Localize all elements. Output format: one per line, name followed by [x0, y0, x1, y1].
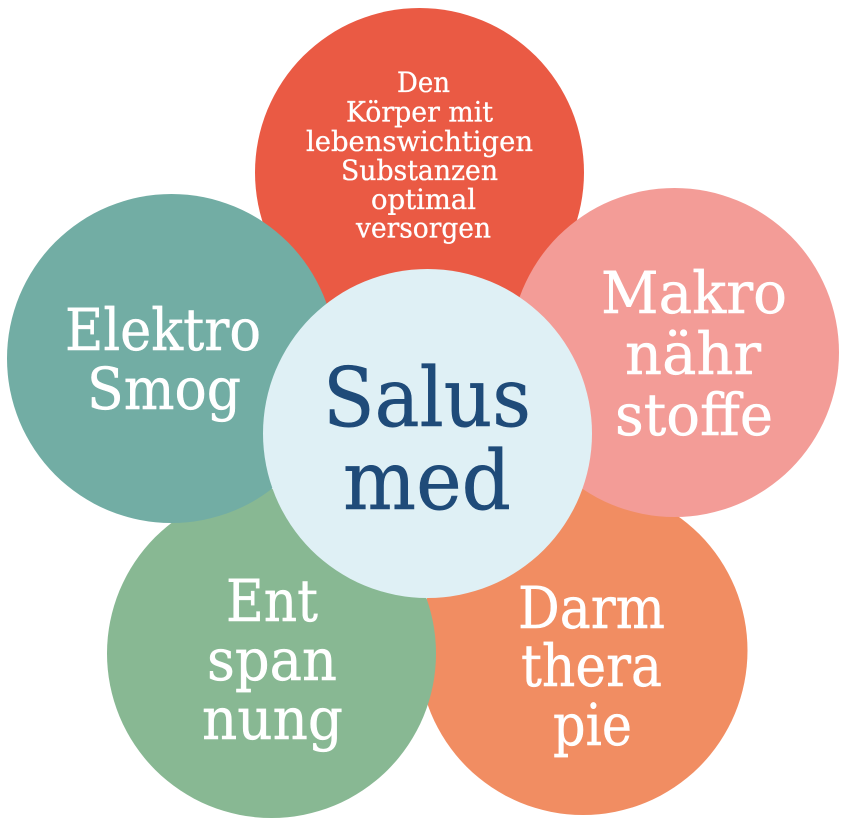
petal: Den Körper mit lebenswichtigen Substanzen optimal versorgen: Den: [397, 66, 450, 99]
petal: Den Körper mit lebenswichtigen Substanzen optimal versorgen: lebenswichtigen: [306, 125, 533, 158]
petal: Den Körper mit lebenswichtigen Substanzen optimal versorgen: [255, 8, 584, 337]
petal: Elektrosmog: Smog: [87, 355, 241, 423]
petal: Entspannung: [107, 489, 436, 818]
center circle: Salus med: med: [343, 434, 511, 529]
petal: Darmtherapie: thera: [521, 632, 662, 700]
petal: Den Körper mit lebenswichtigen Substanzen optimal versorgen: Substanzen: [341, 154, 498, 187]
petal: Makronährstoffe: [510, 188, 839, 517]
petal: Den Körper mit lebenswichtigen Substanzen optimal versorgen: versorgen: [355, 212, 491, 244]
petal: Makronährstoffe: Makro: [601, 259, 787, 327]
center circle: Salus med: Salus: [323, 351, 531, 446]
petal: Darmtherapie: [418, 486, 748, 815]
petal: Den Körper mit lebenswichtigen Substanzen optimal versorgen: Körper mit: [346, 96, 494, 128]
petal: Darmtherapie: pie: [553, 691, 632, 759]
petal: Entspannung: nung: [202, 685, 343, 753]
petal: Elektrosmog: [7, 194, 336, 523]
petal: Makronährstoffe: stoffe: [615, 381, 773, 449]
center circle: Salus med: [263, 269, 592, 598]
petal: Entspannung: Ent: [226, 567, 318, 635]
petal: Entspannung: span: [207, 626, 337, 694]
petal: Elektrosmog: Elektro: [65, 296, 261, 364]
petal: Den Körper mit lebenswichtigen Substanzen optimal versorgen: optimal: [371, 183, 476, 216]
petal: Darmtherapie: Darm: [518, 574, 665, 642]
petal: Makronährstoffe: nähr: [625, 320, 761, 388]
